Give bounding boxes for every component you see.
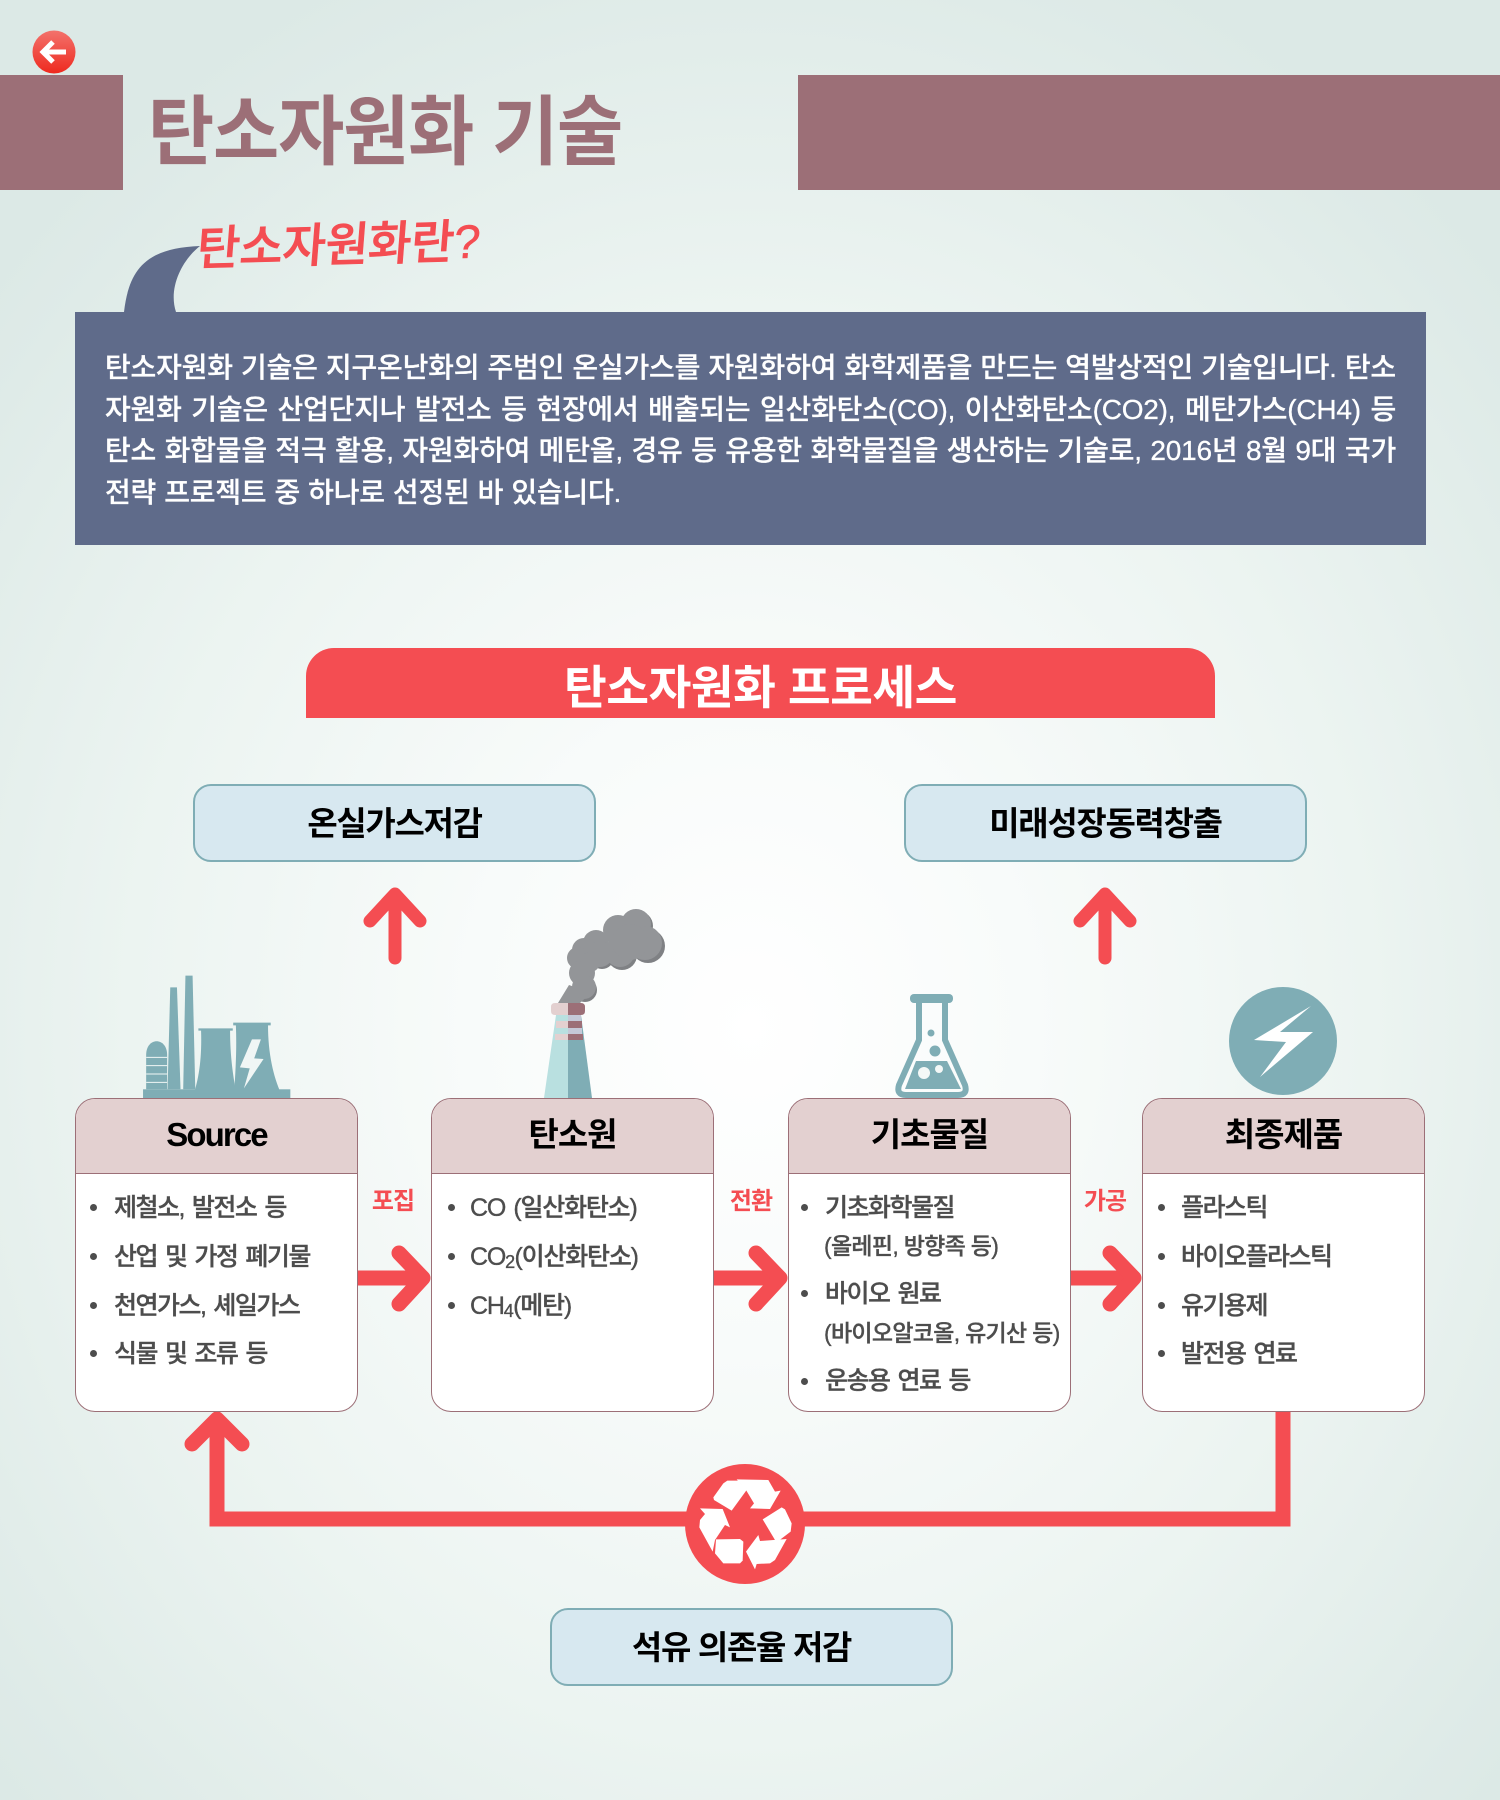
label: capture: 포집 xyxy=(372,1188,414,1215)
card: Source: 산업 및 가정 폐기물 xyxy=(114,1243,310,1271)
card: final products: 플라스틱 xyxy=(1181,1194,1267,1222)
card: Source: 식물 및 조류 등 xyxy=(114,1340,267,1368)
card: base materials: 기초물질 xyxy=(871,1116,988,1153)
card: base materials xyxy=(788,1098,1071,1412)
label: conversion: 전환 xyxy=(730,1188,772,1215)
arrow: capture xyxy=(358,1253,423,1304)
card: carbon sources: CO (일산화탄소) xyxy=(470,1194,637,1222)
speech tail xyxy=(124,246,200,312)
card: Source: 제철소, 발전소 등 xyxy=(114,1194,286,1222)
outcome: reduced oil dependence: 석유 의존율 저감 xyxy=(632,1629,851,1666)
icon: energy bolt xyxy=(1229,987,1337,1095)
arrow: recycle loop xyxy=(192,1411,1283,1519)
card: base materials: 운송용 연료 등 xyxy=(825,1367,970,1395)
left title bar xyxy=(0,75,123,190)
card: Source: 천연가스, 셰일가스 xyxy=(114,1292,299,1320)
card: final products: 최종제품 xyxy=(1225,1116,1342,1153)
title: 탄소자원화 기술 xyxy=(148,91,622,175)
icon: factory xyxy=(143,976,290,1098)
card: base materials: 기초화학물질 xyxy=(825,1194,954,1222)
back button icon xyxy=(32,30,76,74)
outcome: greenhouse gas reduction: 온실가스저감 xyxy=(307,805,482,842)
label: processing: 가공 xyxy=(1084,1188,1126,1215)
description text: 전략 프로젝트 중 하나로 선정된 바 있습니다. xyxy=(105,477,621,508)
card: final products xyxy=(1142,1098,1425,1412)
card: carbon sources: CO2(이산화탄소) xyxy=(470,1243,638,1272)
panel: description xyxy=(75,312,1426,545)
arrow: up to greenhouse gas reduction xyxy=(370,894,420,958)
card: carbon sources: CH4(메탄) xyxy=(470,1292,571,1321)
description text: 탄소 화합물을 적극 활용, 자원화하여 메탄올, 경유 등 유용한 화학물질을 생산하는 기술로, 2016년 8월 9대 국가 xyxy=(105,435,1396,466)
arrow: processing xyxy=(1070,1253,1134,1304)
card: base materials: (올레핀, 방향족 등) xyxy=(824,1233,998,1259)
card: carbon sources: 탄소원 xyxy=(528,1116,617,1153)
arrow: up to future growth xyxy=(1080,894,1130,958)
card: base materials: (바이오알코올, 유기산 등) xyxy=(824,1320,1060,1346)
outcome: future growth: 미래성장동력창출 xyxy=(989,805,1222,842)
icon: flask xyxy=(898,994,966,1095)
description text: 탄소자원화 기술은 지구온난화의 주범인 온실가스를 자원화하여 화학제품을 만드는 역발상적인 기술입니다. 탄소 xyxy=(105,352,1396,383)
description text: 자원화 기술은 산업단지나 발전소 등 현장에서 배출되는 일산화탄소(CO), 이산화탄소(CO2), 메탄가스(CH4) 등 xyxy=(105,394,1396,425)
card: final products: 유기용제 xyxy=(1181,1292,1267,1320)
card: carbon sources xyxy=(431,1098,714,1412)
icon: smokestack xyxy=(544,909,665,1098)
process heading: 탄소자원화 프로세스 xyxy=(564,662,957,714)
arrow: conversion xyxy=(714,1253,780,1304)
outcome: reduced oil dependence xyxy=(550,1608,953,1686)
right title bar xyxy=(798,75,1500,190)
process heading xyxy=(306,648,1215,718)
icon: recycle xyxy=(685,1464,805,1584)
card: base materials: 바이오 원료 xyxy=(825,1280,940,1308)
description text xyxy=(105,352,1396,508)
card: final products: 발전용 연료 xyxy=(1181,1340,1296,1368)
card: final products: 바이오플라스틱 xyxy=(1181,1243,1332,1271)
outcome: future growth xyxy=(904,784,1307,862)
handwritten heading: 탄소자원화란? xyxy=(195,215,482,275)
card: Source: Source xyxy=(166,1116,267,1153)
card: Source xyxy=(75,1098,358,1412)
outcome: greenhouse gas reduction xyxy=(193,784,596,862)
